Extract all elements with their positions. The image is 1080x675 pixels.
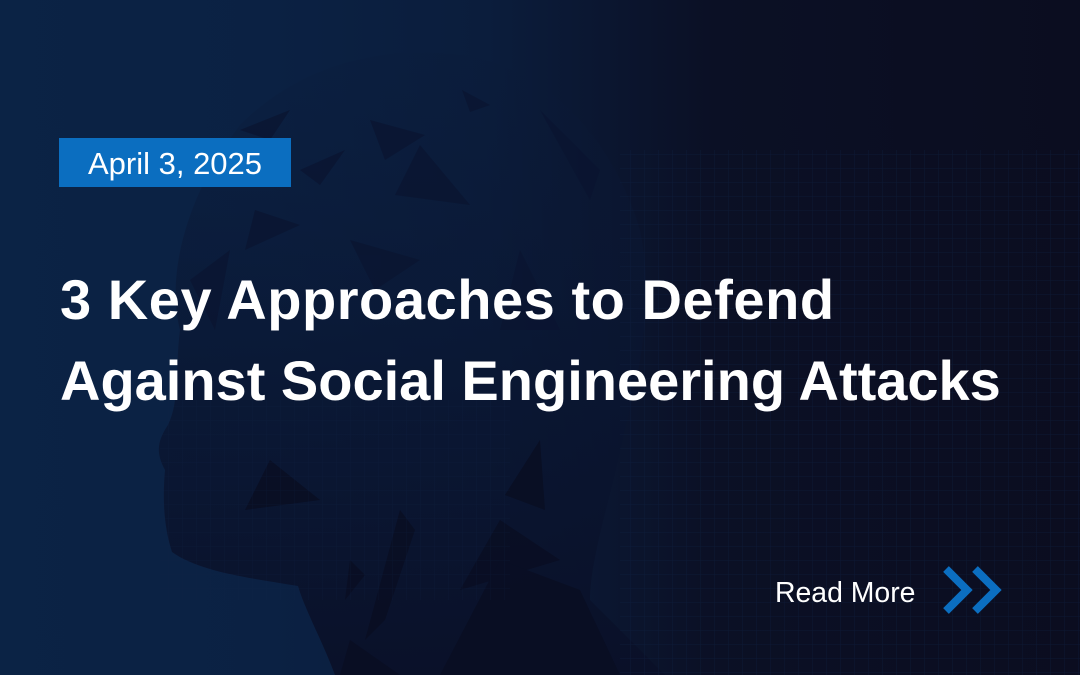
date badge: April 3, 2025 [88,146,262,181]
skull facets [190,90,600,330]
title: Against Social Engineering Attacks [60,349,1001,412]
grid texture [620,150,1080,675]
title: 3 Key Approaches to Defend [60,268,835,331]
title [60,268,1001,412]
icon: double chevron arrow [943,566,1002,614]
read more label: Read More [775,577,915,609]
date badge [59,138,291,187]
skull and face silhouette [159,53,665,675]
face facets [245,440,620,675]
